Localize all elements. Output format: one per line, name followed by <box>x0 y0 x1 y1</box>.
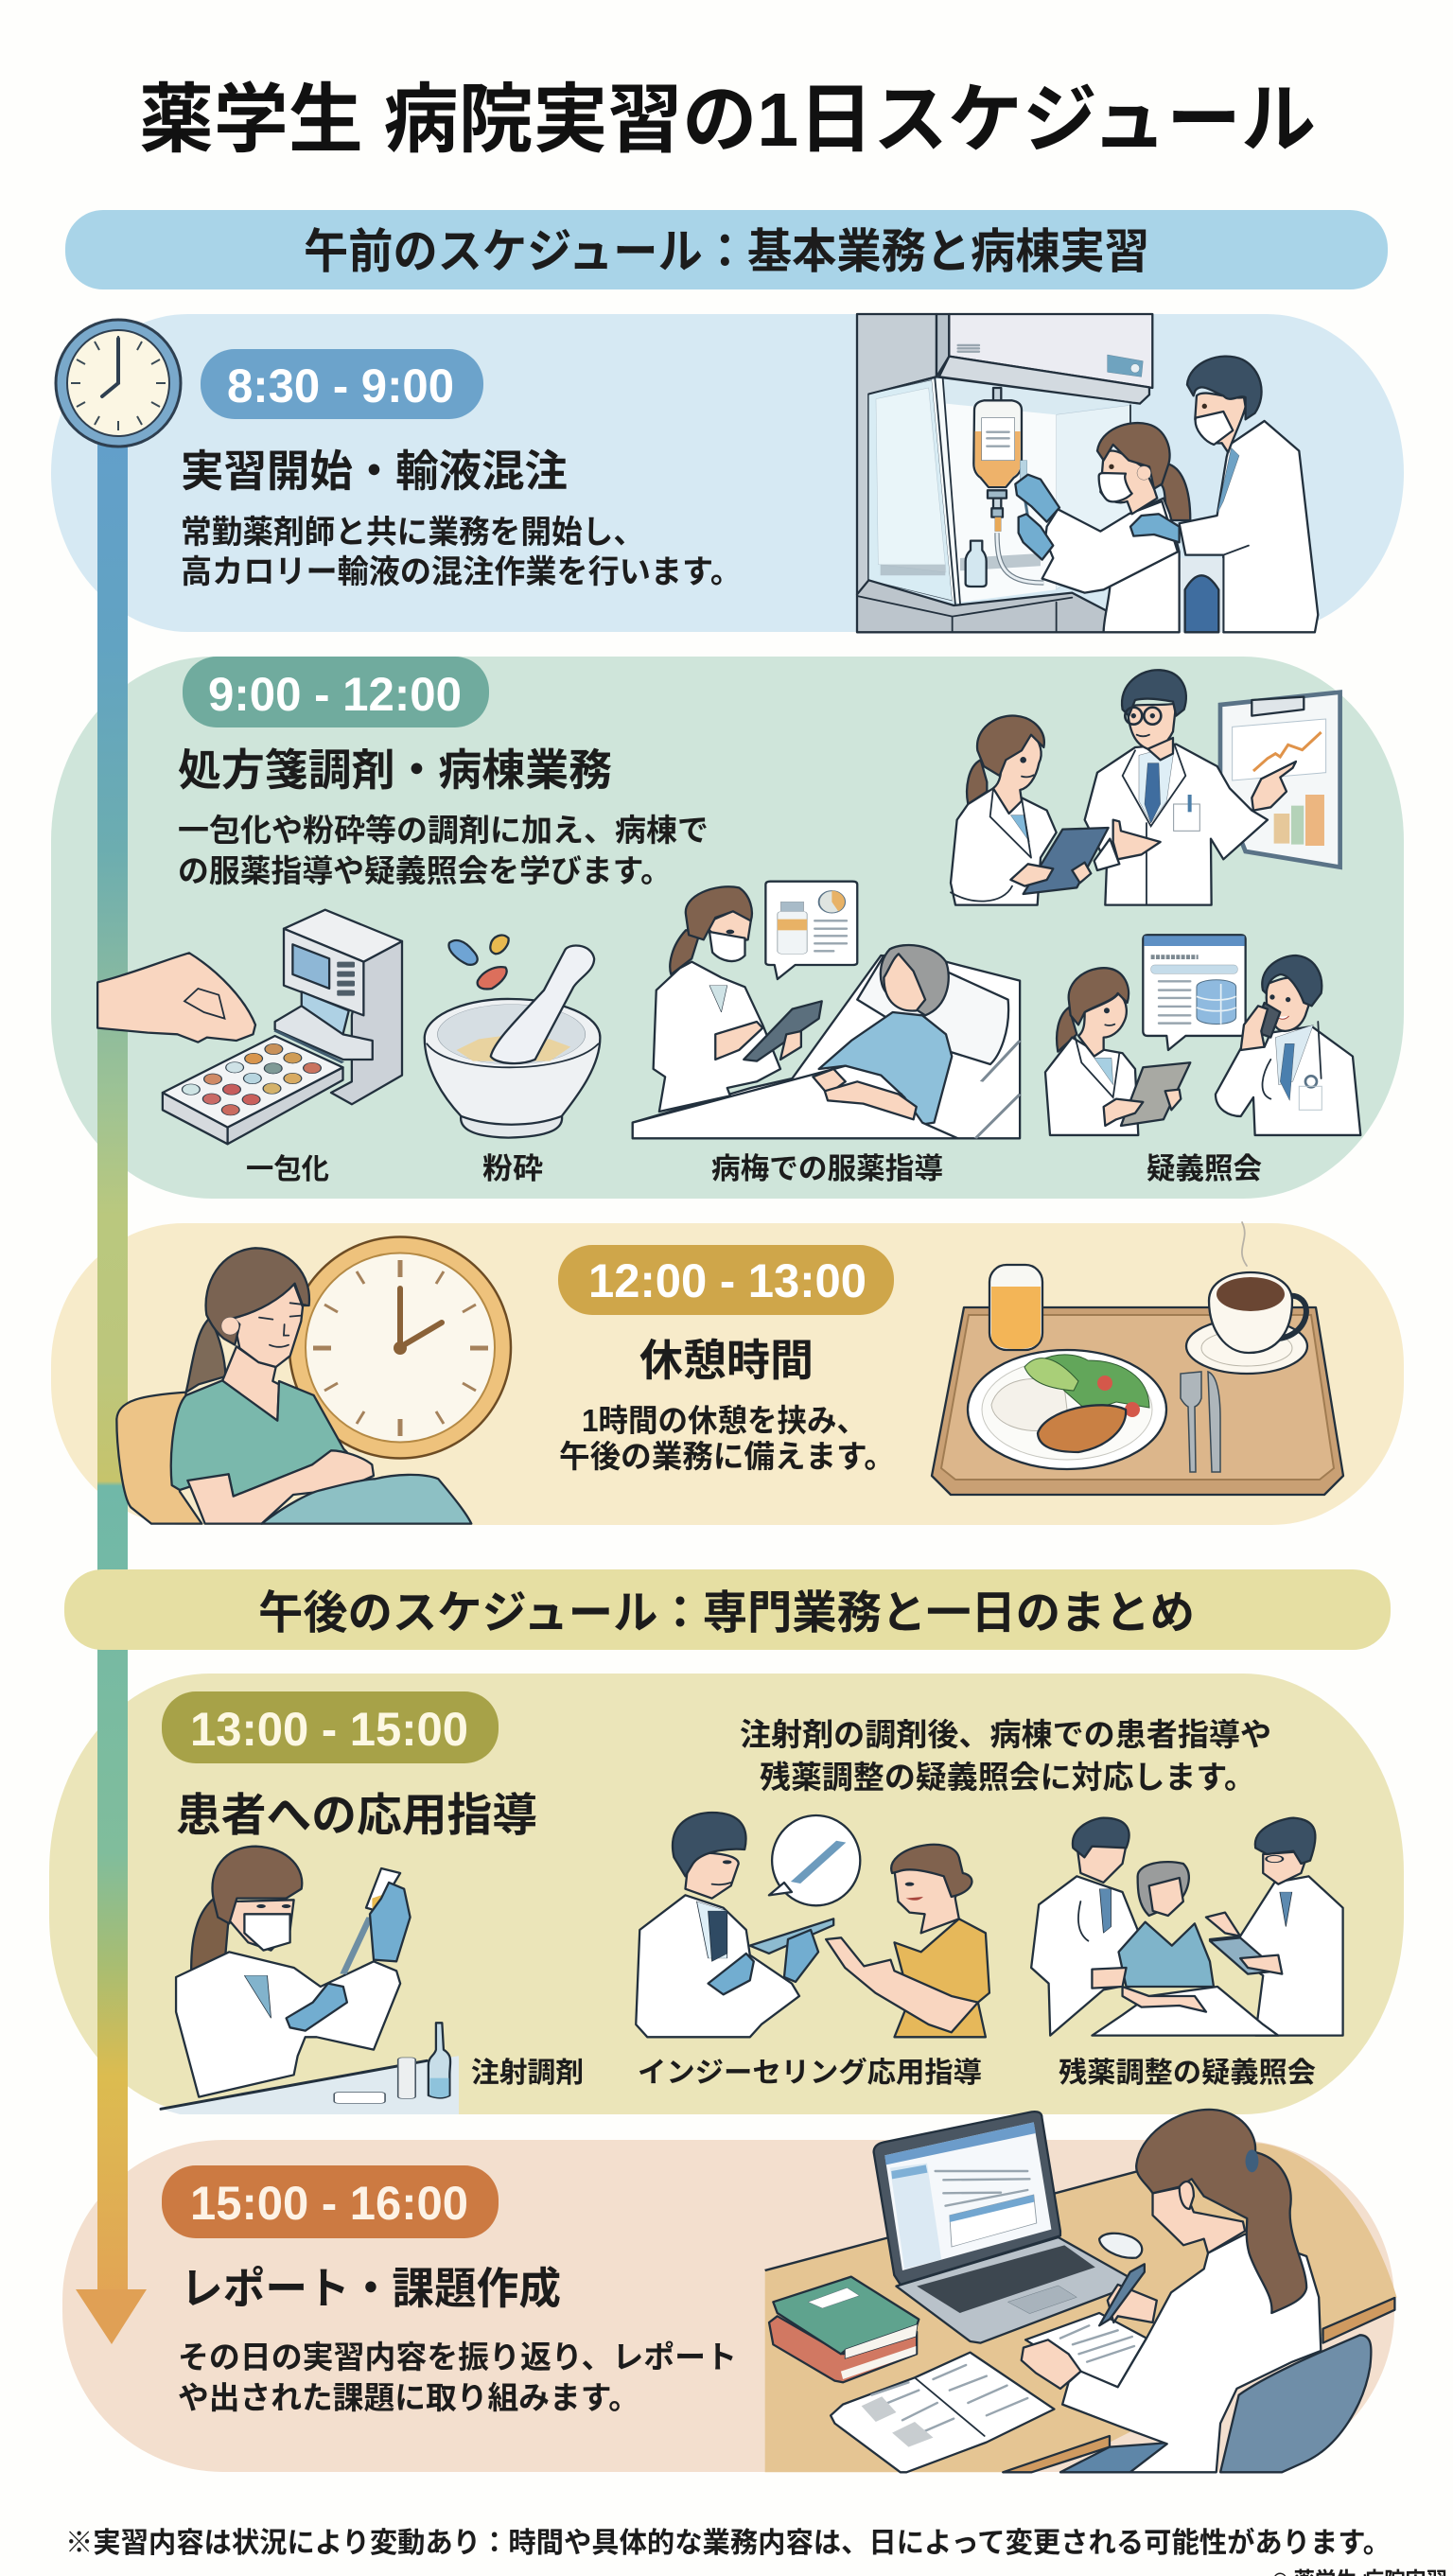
label: インジーセリング応用指導: インジーセリング応用指導 <box>638 2058 982 2089</box>
description: 処方箋調剤: の服薬指導や疑義照会を学びます。 <box>178 853 672 888</box>
description: レポート: や出された課題に取り組みます。 <box>178 2380 639 2415</box>
description: 休憩 <box>559 1403 895 1474</box>
illustration: woman resting in chair <box>116 1248 471 1524</box>
heading: レポート・課題作成: レポート・課題作成 <box>181 2264 561 2313</box>
student <box>1062 2234 1321 2472</box>
time pill 12:00-13:00: 12:00 - 13:00 <box>588 1254 867 1307</box>
panel: 9:00 dispensing and ward work <box>51 657 1404 1199</box>
timeline clock at 8:00 <box>56 320 181 447</box>
description: レポート <box>178 2339 737 2415</box>
time pill 12:00-13:00 <box>558 1245 894 1315</box>
banner: afternoon schedule: 午後のスケジュール：専門業務と一日のまとめ <box>258 1588 1195 1638</box>
time pill 9:00-12:00: 9:00 - 12:00 <box>208 668 462 721</box>
panel: 13:00 patient guidance <box>49 1674 1404 2114</box>
panel: 12:00 break <box>51 1222 1404 1525</box>
illustration: mortar and pestle with pills <box>425 936 600 1138</box>
timeline bar with arrow <box>76 435 147 2344</box>
coffee cup <box>1186 1222 1307 1374</box>
description: 休憩: 1時間の休憩を挟み、 <box>582 1403 867 1438</box>
illustration: clean bench and two pharmacists <box>857 314 1318 632</box>
time pill 8:30-9:00 <box>201 349 483 419</box>
label: 注射調剤: 注射調剤 <box>471 2058 584 2089</box>
time pill 15:00-16:00 <box>162 2165 499 2238</box>
footnote: ※実習内容は状況により変動あり：時間や具体的な業務内容は、日によって変更される可能性があります。 <box>65 2527 1391 2559</box>
panel: 8:30 intravenous mixing <box>51 314 1404 632</box>
description: 注射剤: 注射剤の調剤後、病棟での患者指導や <box>740 1717 1271 1752</box>
books <box>769 2316 917 2382</box>
fork and knife <box>1181 1372 1220 1472</box>
illustration: leftover medicine inquiry <box>1031 1818 1343 2036</box>
time pill 13:00-15:00: 13:00 - 15:00 <box>190 1703 468 1756</box>
description: 注射剤 <box>740 1717 1271 1795</box>
description: 実習開始 <box>181 515 742 590</box>
time pill 15:00-16:00: 15:00 - 16:00 <box>190 2177 468 2230</box>
time pill 8:30-9:00: 8:30 - 9:00 <box>227 359 454 412</box>
illustration: student at desk with laptop and books <box>765 2110 1397 2472</box>
description: 処方箋調剤: 一包化や粉砕等の調剤に加え、病棟で <box>178 813 709 848</box>
label: 疑義照会: 疑義照会 <box>1147 1152 1262 1185</box>
man <box>1180 421 1318 632</box>
label: 残薬調整の疑義照会: 残薬調整の疑義照会 <box>1059 2058 1316 2089</box>
laptop <box>896 2237 1128 2343</box>
description: 休憩: 午後の業務に備えます。 <box>559 1439 895 1474</box>
description: 実習開始: 常勤薬剤師と共に業務を開始し、 <box>181 515 644 551</box>
illustration: doctor inquiry by phone <box>1045 935 1360 1135</box>
label: 一包化: 一包化 <box>246 1154 329 1185</box>
illustration: self-injection guidance <box>636 1813 989 2037</box>
woman <box>1057 1008 1077 1052</box>
illustration: preparing an injection <box>161 1847 459 2114</box>
open book <box>831 2353 1054 2472</box>
label: 病棟での服薬指導: 病梅での服薬指導 <box>711 1152 943 1185</box>
label: 粉砕: 粉砕 <box>482 1152 543 1185</box>
banner: morning schedule: 午前のスケジュール：基本業務と病棟実習 <box>304 225 1149 278</box>
title: 薬学生 病院実習の1日スケジュール <box>139 78 1316 162</box>
heading: 実習開始: 実習開始・輸液混注 <box>181 447 568 496</box>
plate of food <box>968 1350 1166 1469</box>
banner: afternoon schedule <box>64 1569 1391 1650</box>
heading: 患者への応用指導: 患者への応用指導 <box>176 1791 537 1841</box>
woman <box>1151 464 1190 520</box>
illustration: wall clock at 2:00 <box>289 1237 511 1459</box>
description: レポート: その日の実習内容を振り返り、レポート <box>178 2339 737 2374</box>
illustration: mentor pharmacist and student at chart <box>951 670 1340 905</box>
patient woman <box>894 1919 989 2037</box>
illustration: hand and unit-dose packing machine <box>97 910 402 1144</box>
speech bubble with medicine <box>765 882 857 979</box>
heading: 休憩時間: 休憩時間 <box>639 1336 814 1385</box>
heading: 処方箋調剤: 処方箋調剤・病棟業務 <box>178 745 612 795</box>
illustration: meal tray <box>932 1222 1343 1495</box>
juice glass <box>989 1265 1042 1350</box>
chair <box>1220 2335 1371 2472</box>
illustration: bedside medication counselling <box>633 882 1020 1138</box>
time pill 13:00-15:00 <box>162 1691 499 1763</box>
description: 注射剤: 残薬調整の疑義照会に対応します。 <box>760 1760 1255 1795</box>
student <box>967 760 987 804</box>
nurse <box>670 930 701 974</box>
paper and hands <box>1025 2313 1147 2387</box>
man <box>1216 1026 1360 1135</box>
time pill 9:00-12:00 <box>183 657 489 727</box>
description: 処方箋調剤 <box>178 813 709 888</box>
description: 実習開始: 高カロリー輸液の混注作業を行います。 <box>181 554 742 590</box>
banner: morning schedule <box>65 210 1388 289</box>
panel: 15:00 report writing <box>62 2110 1397 2472</box>
